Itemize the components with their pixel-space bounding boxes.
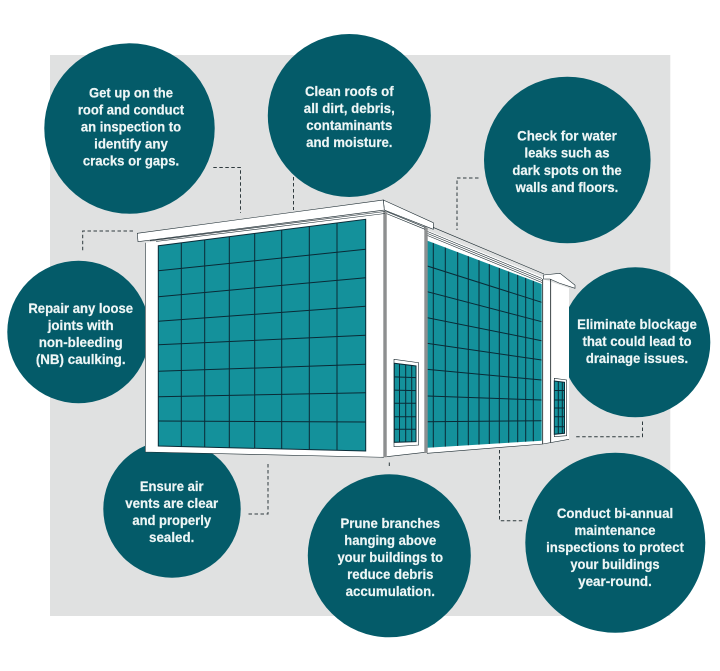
callout text: roof inspection: Get up on the (89, 84, 173, 100)
right end pier (543, 273, 575, 444)
callout text: drainage blockage (577, 316, 697, 366)
callout text: prune branches: accumulation. (346, 583, 435, 599)
callout text: clean roofs: Clean roofs of (305, 83, 394, 99)
callout text: repair joints: non-bleeding (39, 334, 123, 350)
callout text: prune branches: Prune branches (340, 515, 440, 531)
callout text: roof inspection: an inspection to (81, 118, 181, 134)
front roof edge (137, 200, 384, 242)
callout text: clean roofs: all dirt, debris, (304, 100, 395, 116)
callout text: bi-annual inspections: year-round. (578, 573, 652, 589)
callout text: air vents: vents are clear (125, 495, 219, 511)
building illustration (137, 200, 575, 457)
callout: roof inspection (44, 43, 215, 214)
long side wall (427, 227, 544, 453)
callout text: water leaks (512, 128, 622, 195)
callout text: repair joints: joints with (47, 317, 114, 333)
front glass curtain wall (158, 215, 366, 455)
small window: right pier (554, 378, 567, 437)
callout text: prune branches: your buildings to (337, 549, 443, 565)
callout text: prune branches: hanging above (344, 532, 436, 548)
callout text: air vents: sealed. (149, 529, 194, 545)
callout text: roof inspection: identify any (94, 135, 168, 151)
side glass curtain wall (427, 230, 542, 450)
callout text: water leaks: dark spots on the (512, 162, 622, 178)
callout text: bi-annual inspections: your buildings (570, 556, 660, 572)
small window: corner pier (394, 359, 419, 447)
callout text: prune branches: reduce debris (347, 566, 434, 582)
callout text: roof inspection: cracks or gaps. (83, 152, 179, 168)
callout text: air vents (125, 478, 219, 545)
corner pier (383, 200, 433, 457)
front wall (137, 200, 387, 457)
callout text: clean roofs: contaminants (306, 117, 393, 133)
callout text: roof inspection: roof and conduct (78, 101, 184, 117)
callout: air vents (103, 440, 241, 578)
connector: blockage (576, 422, 642, 437)
callout text: air vents: Ensure air (140, 478, 204, 494)
callout text: clean roofs (304, 83, 395, 150)
callout: water leaks (484, 77, 651, 243)
background panel (50, 55, 670, 616)
callout: bi-annual inspections (525, 453, 705, 633)
connector: roof inspection (213, 168, 240, 213)
callout: drainage blockage (560, 267, 710, 417)
callout: clean roofs (268, 34, 431, 197)
connector: clean roofs (292, 177, 294, 210)
connector: bi-annual inspections (500, 450, 523, 521)
callout text: bi-annual inspections: inspections to protect (546, 539, 684, 555)
connector: air vents (246, 464, 268, 514)
callout text: repair joints: (NB) caulking. (36, 351, 126, 367)
callout text: repair joints: Repair any loose (28, 300, 133, 316)
connector: water leaks (457, 178, 478, 230)
callout text: water leaks: Check for water (517, 128, 617, 144)
callout text: bi-annual inspections (546, 505, 684, 589)
callout text: prune branches (337, 515, 443, 599)
connector: repair joints (83, 231, 133, 252)
callout text: bi-annual inspections: maintenance (574, 522, 656, 538)
callout text: drainage blockage: that could lead to (582, 333, 692, 349)
callout text: clean roofs: and moisture. (306, 134, 392, 150)
callout text: drainage blockage: drainage issues. (586, 350, 688, 366)
callout text: air vents: and properly (132, 512, 211, 528)
callout: repair joints (7, 261, 150, 403)
long side roof edge (433, 227, 544, 274)
callout text: water leaks: walls and floors. (515, 179, 618, 195)
callout text: water leaks: leaks such as (524, 145, 610, 161)
corner pier roof cap (383, 200, 433, 229)
callout text: repair joints (28, 300, 133, 367)
callout text: bi-annual inspections: Conduct bi-annual (557, 505, 673, 521)
callout text: roof inspection (78, 84, 184, 168)
callout: prune branches (308, 474, 471, 637)
connector: prune branches (388, 462, 390, 468)
callout text: drainage blockage: Eliminate blockage (577, 316, 697, 332)
